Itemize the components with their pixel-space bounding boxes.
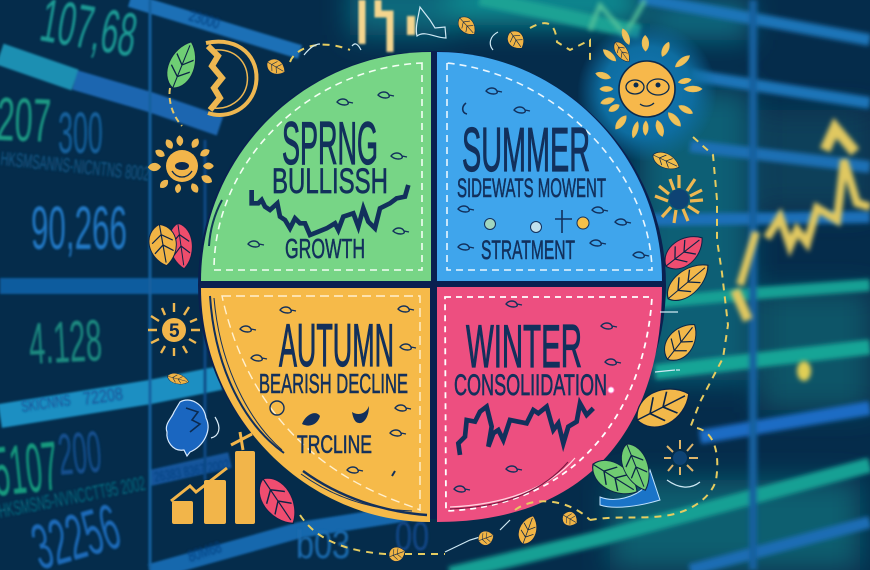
panel: spring xyxy=(201,52,431,281)
summer doodles xyxy=(458,88,649,258)
white squiggles xyxy=(304,7,700,552)
right side grid bands xyxy=(450,0,870,570)
icon: blue blob creature xyxy=(166,400,219,456)
icon: smiling sun left xyxy=(148,135,214,194)
panel: autumn xyxy=(201,288,430,522)
panel: autumn: AUTUMN xyxy=(279,312,394,379)
ticker numbers: 72208 xyxy=(82,384,124,409)
spring doodles xyxy=(248,92,409,247)
icon: large yellow leaf xyxy=(629,379,697,435)
icon: sun with five: 5 xyxy=(169,321,180,342)
icon: small yellow leaf xyxy=(166,371,190,387)
icon: bottom leaves xyxy=(387,509,580,564)
panel: winter xyxy=(437,287,662,522)
icon: smiling sun top right xyxy=(595,28,702,139)
panel: summer: SUMMER xyxy=(462,116,590,185)
ticker numbers: 300 xyxy=(58,100,103,166)
ticker numbers: b03 xyxy=(296,522,350,567)
panel: summer xyxy=(437,52,662,281)
icon: green leaf top left xyxy=(161,37,203,126)
icon: green leaves bottom right xyxy=(586,439,660,507)
winter doodles xyxy=(454,301,621,492)
pie backing ring xyxy=(198,51,666,519)
icon: leaf under sun xyxy=(650,148,682,174)
label: consolidation: CONSOLIIDATION xyxy=(454,369,607,402)
dashed trails xyxy=(290,23,728,554)
ticker numbers: 00 xyxy=(395,513,429,559)
left side grid bands xyxy=(0,0,440,570)
label: bearish decline: BEARISH DECLINE xyxy=(259,368,408,399)
autumn doodles xyxy=(240,306,416,476)
sun halo xyxy=(577,22,717,162)
label: growth: GROWTH xyxy=(285,233,365,264)
icon: leaves left xyxy=(146,222,195,270)
right side teal glow xyxy=(350,0,870,570)
autumn curved arrow xyxy=(210,296,427,515)
ticker numbers: 80M68 xyxy=(185,537,224,565)
icon: rising bar chart xyxy=(171,432,255,524)
winter line chart xyxy=(458,403,593,455)
label: bullish: BULLISSH xyxy=(272,162,388,201)
icon: crescent moon xyxy=(206,42,257,115)
top yellow chart fragments xyxy=(362,0,411,52)
icon: sun with five xyxy=(148,303,200,356)
pie chart xyxy=(198,51,666,522)
icon: red leaf bottom left xyxy=(251,471,305,531)
icon: small sun lower right xyxy=(664,440,698,475)
ticker numbers: 26383 8367 2002 xyxy=(153,456,231,485)
label: sideways movement: SIDEWATS MOWENT xyxy=(457,173,606,203)
ticker numbers: SKICNNS xyxy=(20,390,72,415)
ticker numbers xyxy=(0,0,429,570)
icon: top leaves xyxy=(264,13,634,78)
ticker numbers: 4.128 xyxy=(27,307,103,377)
yellow market line right xyxy=(735,128,870,381)
ticker numbers: HKSMSANNS-NICNTNS 8002 xyxy=(0,148,151,186)
ticker numbers: HKSMSN5-NVNCCTT95 2002 xyxy=(0,473,147,523)
ticker numbers: 23000 xyxy=(187,6,222,32)
teal chart line top right xyxy=(590,0,645,35)
label: stratment: STRATMENT xyxy=(481,235,575,265)
icon: yellow leaf right xyxy=(657,317,705,367)
panel: spring: SPRNG xyxy=(282,110,378,177)
icon: red and yellow leaves right xyxy=(658,228,716,308)
ticker numbers: 90,266 xyxy=(31,195,127,263)
icon: dark centre sunflower xyxy=(655,175,703,223)
ticker numbers: 200 xyxy=(55,418,104,488)
label: trcline: TRCLINE xyxy=(297,431,372,459)
spring line chart xyxy=(252,185,408,235)
panel: winter: WINTER xyxy=(466,313,582,380)
